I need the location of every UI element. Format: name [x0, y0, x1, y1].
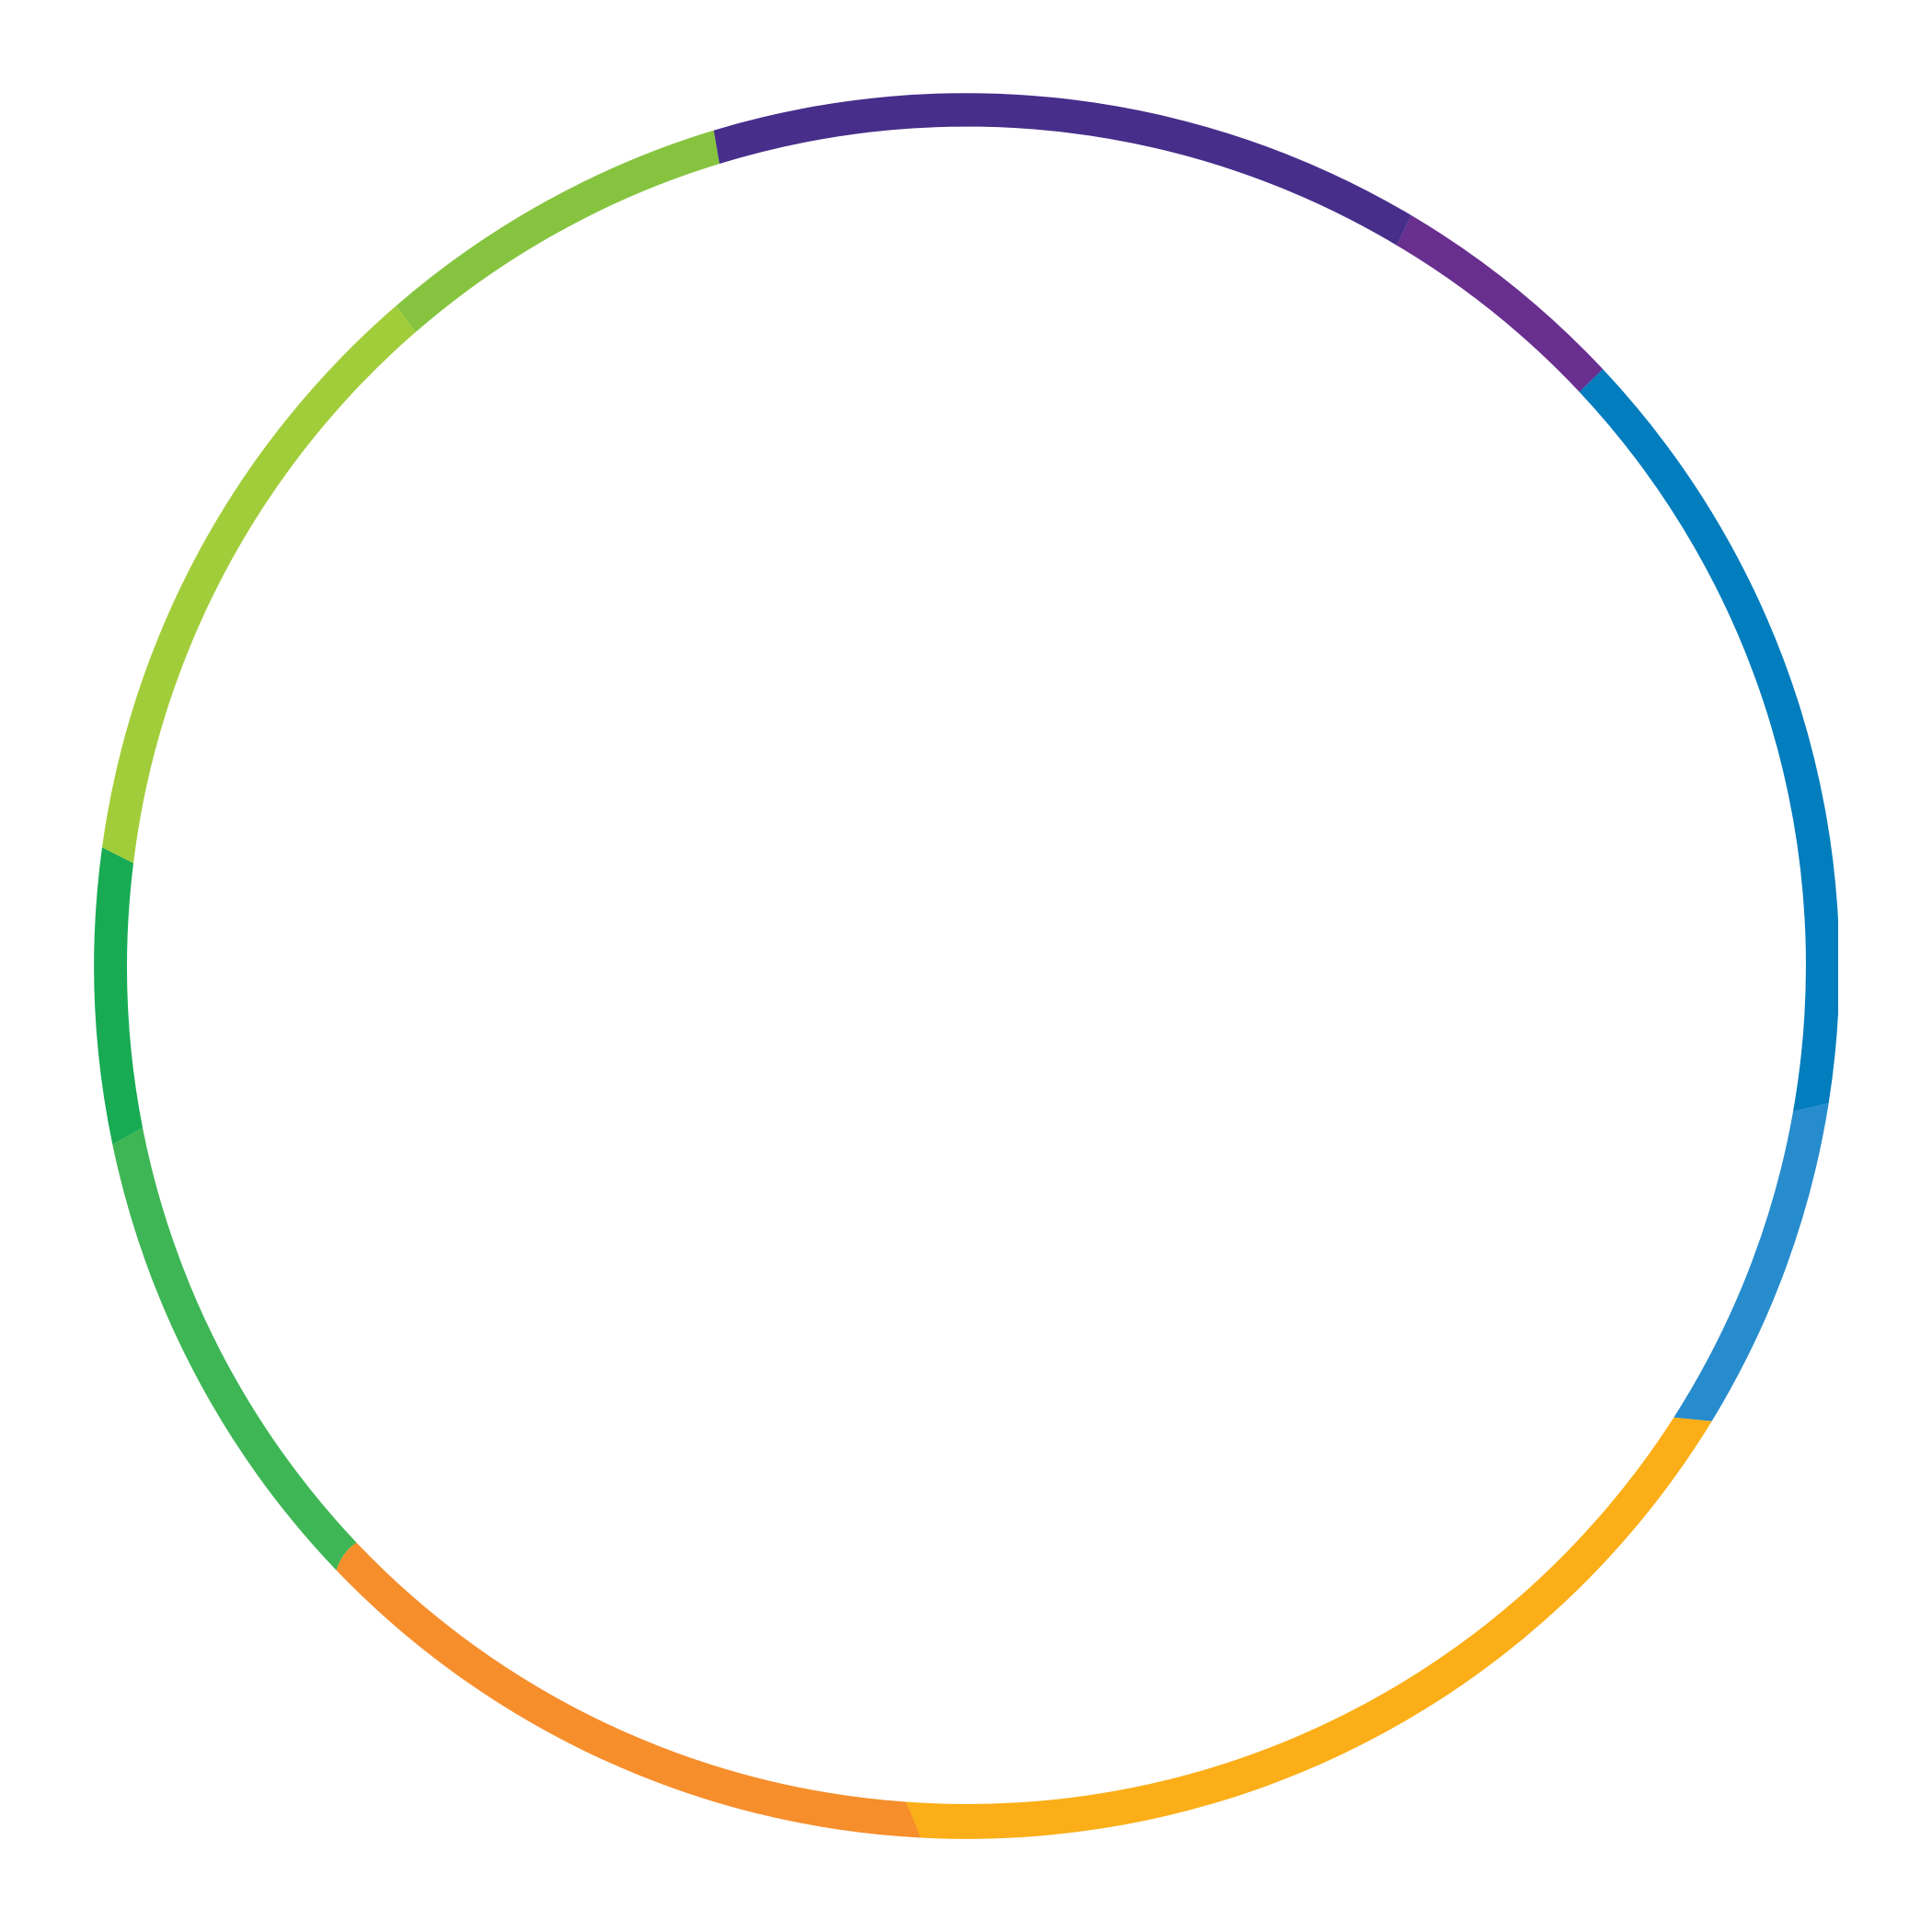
ring segment: lime — [102, 305, 416, 863]
ring segment: dark blue — [1580, 369, 1839, 1111]
ring segment: purple — [1397, 215, 1603, 392]
ring segment: light blue — [1673, 1103, 1829, 1421]
ring segment: dark green — [94, 847, 143, 1144]
ring segment: medium green — [112, 1128, 357, 1570]
ring segment: yellow — [905, 1418, 1712, 1839]
ring segment: indigo — [714, 93, 1411, 246]
ring segment: orange — [337, 1543, 920, 1838]
ring segment: leaf green — [397, 131, 719, 332]
